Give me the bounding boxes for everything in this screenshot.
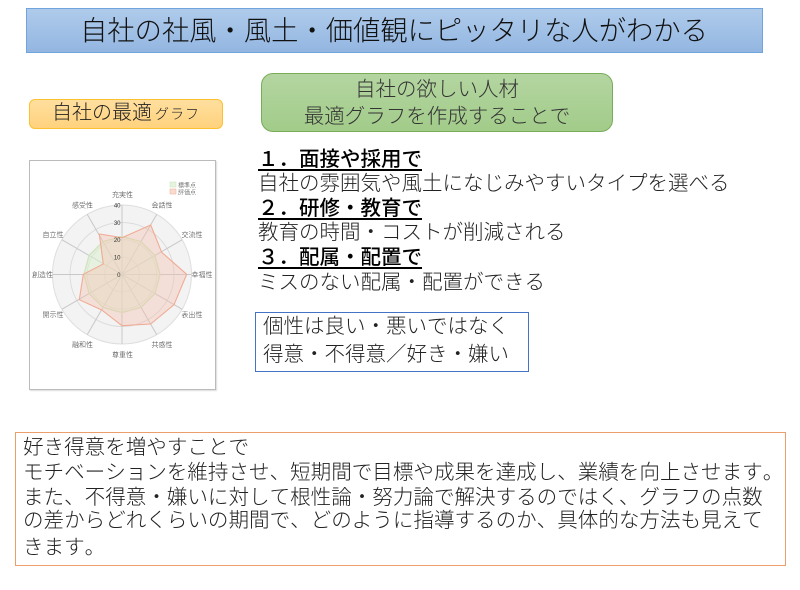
axis tick labels: 40 (114, 204, 121, 210)
label: optimal graph (29, 99, 223, 129)
axis labels: 共感性 (152, 340, 172, 349)
chart legend: 評価点 (178, 188, 196, 196)
summary line 1: 好き得意を増やすことで (23, 436, 249, 459)
benefits list (258, 148, 730, 294)
title banner (26, 8, 763, 53)
benefit 2 text: 教育の時間・コストが削減される (258, 221, 566, 244)
axis labels: 感受性 (72, 200, 93, 210)
axis labels: 幸福性 (192, 270, 212, 279)
axis labels: 充実性 (112, 190, 133, 199)
axis labels: 融和性 (72, 340, 93, 349)
axis labels: 交流性 (182, 230, 202, 239)
summary line 4: の差からどれくらいの期間で、どのように指導するのか、具体的な方法も見えて (23, 509, 763, 532)
summary line 3: また、不得意・嫌いに対して根性論・努力論で解決するのではく、グラフの点数 (23, 486, 763, 509)
benefit 1 heading: １．面接や採用で (258, 148, 422, 171)
note box: individuality: 個性は良い・悪いではなく (263, 315, 509, 338)
chart legend (170, 182, 196, 196)
callout: desired talent: 最適グラフを作成することで (304, 105, 570, 128)
radar grid (52, 205, 192, 344)
callout: desired talent (261, 73, 613, 132)
callout: desired talent: 自社の欲しい人材 (355, 78, 519, 101)
axis labels: 創造性 (32, 270, 53, 279)
axis labels: 開示性 (42, 310, 64, 319)
title banner: 自社の社風・風土・価値観にピッタリな人がわかる (80, 15, 708, 46)
label: optimal graph: 自社の最適グラフ (52, 102, 200, 124)
note box: individuality (255, 312, 529, 372)
panel: radar chart (29, 160, 216, 390)
benefit 1 text: 自社の雰囲気や風土になじみやすいタイプを選べる (258, 172, 730, 195)
axis tick labels (114, 204, 121, 279)
axis labels: 自立性 (42, 230, 64, 239)
axis tick labels: 10 (114, 256, 121, 262)
benefit 3 heading: ３．配属・配置で (258, 246, 422, 269)
benefit 3 text: ミスのない配属・配置ができる (258, 271, 545, 294)
axis tick labels: 30 (114, 221, 121, 227)
note box: individuality: 得意・不得意／好き・嫌い (263, 343, 509, 366)
summary text box (15, 432, 786, 566)
axis labels: 会話性 (152, 200, 172, 210)
chart legend: 標準点 (178, 182, 196, 190)
axis labels: 表出性 (182, 310, 202, 319)
summary line 2: モチベーションを維持させ、短期間で目標や成果を達成し、業績を向上させます。 (23, 461, 783, 484)
axis labels: 尊重性 (112, 350, 133, 359)
series: standard score (84, 236, 160, 312)
summary line 5: きます。 (23, 536, 105, 559)
series: evaluation score (79, 225, 187, 326)
axis tick labels: 0 (117, 273, 121, 279)
axis tick labels: 20 (114, 238, 121, 244)
axis labels (32, 190, 212, 359)
benefit 2 heading: ２．研修・教育で (258, 197, 422, 220)
